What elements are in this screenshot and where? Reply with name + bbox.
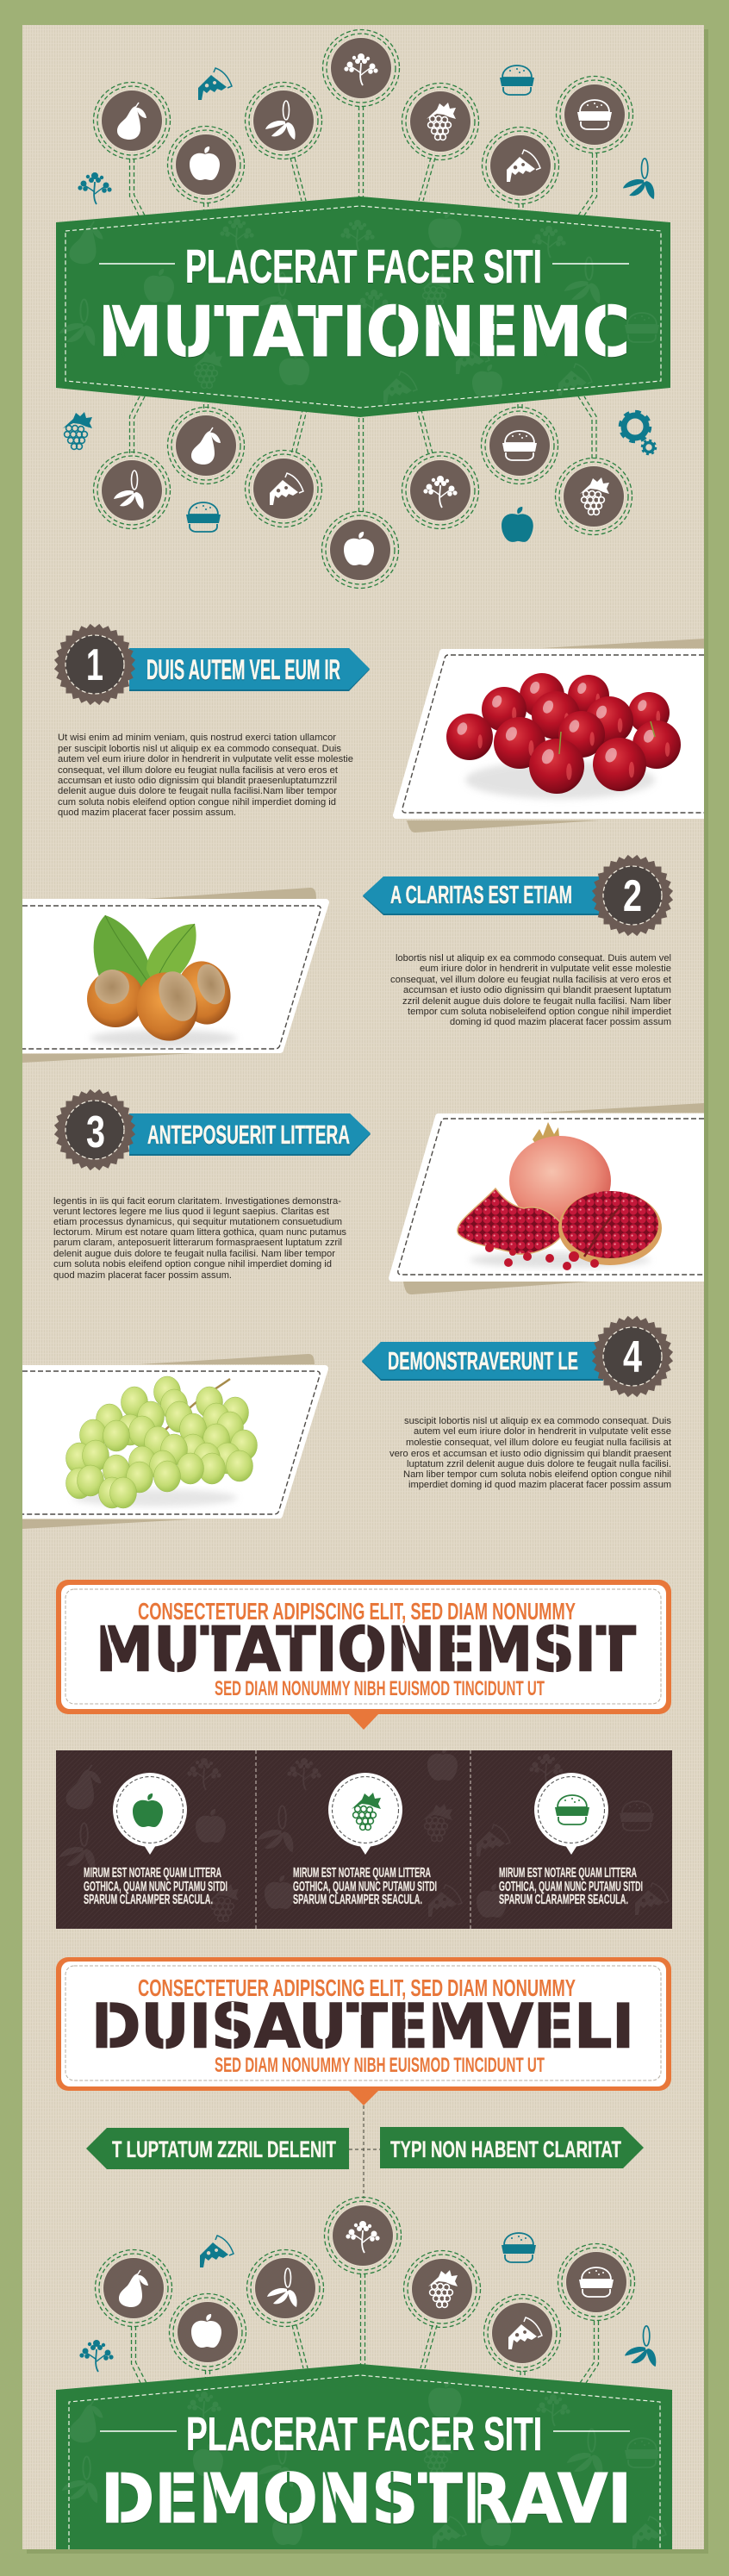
footer main title: DEMONSTRAVI: [101, 2461, 632, 2539]
icon node: burger lower: [481, 407, 558, 484]
photo: pomegranate: [458, 1122, 662, 1270]
tan shadow card 4: [22, 1354, 315, 1529]
dark panel watermarks: [59, 1747, 669, 1921]
column 1 text: SPARUM CLARAMPER SEACULA.: [84, 1893, 213, 1907]
photo card 4: [9, 1369, 325, 1515]
body text 4: molestie consequat, vel illum dolore eu feugiat nulla facilisis at: [406, 1438, 672, 1448]
ribbon 1: [129, 648, 370, 691]
column 2 text: GOTHICA, QUAM NUNC PUTAMU SITDI: [293, 1880, 437, 1894]
photo card 1: [396, 652, 715, 815]
number badge 3: 3: [86, 1107, 105, 1157]
body text 2: eum iriure dolor in hendrerit in vulputate velit esse molestie: [420, 964, 671, 974]
body text 4: Nam liber tempor cum soluta nobis eleifend option congue nihil: [403, 1469, 671, 1480]
icon node: banana: [245, 83, 322, 159]
column 3 text: SPARUM CLARAMPER SEACULA.: [499, 1893, 628, 1907]
body text 2: accumsan et iusto odio dignissim qui blandit praesent luptatum: [403, 985, 671, 995]
body text 4: vero eros et accumsan et iusto odio dignissim qui blandit praesent: [389, 1449, 672, 1459]
body text 1: accumsan et iusto odio dignissim qui blandit praesenluptatumzzril: [58, 776, 337, 786]
section 1: [54, 624, 715, 833]
body text 4: [389, 1416, 672, 1490]
body text 1: quod mazim placerat facer possim assum.: [58, 808, 236, 818]
section 4: [9, 1316, 673, 1529]
banner dashed outline: [65, 206, 661, 408]
callout arrow: [348, 1713, 379, 1730]
footer dashed outline: [69, 2375, 660, 2549]
number badge 1: 1: [86, 640, 103, 690]
green ribbon left: [86, 2128, 349, 2169]
photo card 3: [392, 1117, 715, 1278]
body text 4: luptatum zzril delenit augue duis dolore te feugait nulla facilisi.: [407, 1459, 671, 1469]
teal icons lower: [63, 412, 656, 542]
body text 1: delenit augue duis dolore te feugait nulla facilisi.Nam liber tempor: [58, 786, 337, 796]
body text 1: Ut wisi enim ad minim veniam, quis nostrud exerci tation ullamcor: [58, 733, 336, 743]
ribbon 4: DEMONSTRAVERUNT LE: [388, 1348, 578, 1375]
green ribbon left: T LUPTATUM ZZRIL DELENIT: [112, 2136, 336, 2162]
icon node: burger: [557, 76, 632, 153]
body text 2: consequat, vel illum dolore eu feugiat nulla facilisis at vero eros et: [390, 975, 672, 985]
body text 2: tempor cum soluta nobiseleifend option congue nihil imperdiet: [408, 1007, 672, 1017]
number badge 4: [592, 1316, 673, 1397]
body text 4: suscipit lobortis nisl ut aliquip ex ea commodo consequat. Duis: [404, 1416, 671, 1426]
column 2 text: SPARUM CLARAMPER SEACULA.: [293, 1893, 422, 1907]
number badge 2: 2: [623, 871, 642, 921]
icon node: banana lower: [93, 452, 171, 529]
icon node: grapes lower: [555, 458, 632, 534]
column 1 text: [84, 1866, 227, 1907]
number badge 1: [54, 624, 135, 705]
body text 3: [53, 1196, 346, 1281]
icon node: pear: [93, 83, 171, 159]
callout box: mutationemsit: [56, 1580, 671, 1730]
body text 1: autem vel eum iriure dolor in hendrerit in vulputate velit esse molestie: [58, 754, 353, 764]
footer subtitle: PLACERAT FACER SITI: [186, 2407, 542, 2461]
callout subline: SED DIAM NONUMMY NIBH EUISMOD TINCIDUNT UT: [215, 2054, 545, 2077]
white inner box: [61, 1585, 666, 1709]
dark panel: three columns: [56, 1747, 672, 1929]
number badge 4: 4: [623, 1332, 642, 1382]
column 1 text: GOTHICA, QUAM NUNC PUTAMU SITDI: [84, 1880, 227, 1894]
banner watermark icons: [59, 211, 659, 403]
callout title: MUTATIONEMSIT: [96, 1613, 637, 1686]
column 2 text: [293, 1866, 437, 1907]
photo: red plums: [446, 673, 681, 799]
photo: hazelnuts and leaves: [87, 915, 238, 1048]
body text 4: autem vel eum iriure dolor in hendrerit in vulputate velit esse: [414, 1426, 671, 1437]
body text 2: zzril delenit augue duis dolore te feugait nulla facilisi. Nam liber: [402, 996, 671, 1007]
icon node: parsley lower: [402, 452, 479, 529]
column 3 text: [499, 1866, 643, 1907]
body text 3: cum soluta nobis eleifend option congue nihil imperdiet doming id: [53, 1259, 332, 1269]
body text 3: etiam processus dynamicus, qui sequitur mutationem consuetudium: [53, 1217, 342, 1227]
body text 3: quod mazim placerat facer possim assum.: [53, 1270, 232, 1281]
connector lines above banner: [129, 106, 596, 215]
footer rule lines: [100, 2430, 630, 2432]
body text 2: lobortis nisl ut aliquip ex ea commodo consequat. Duis autem vel: [396, 953, 671, 964]
banner hexagon: [56, 196, 670, 417]
footer banner shape: [56, 2364, 672, 2549]
photo card 2: [9, 902, 326, 1050]
dashed connector to lower tree: [349, 2105, 380, 2199]
icon node: grapes: [402, 83, 479, 160]
green ribbon right: [380, 2127, 644, 2168]
body text 3: legentis in iis qui facit eorum claritatem. Investigationes demonstra-: [53, 1196, 341, 1207]
ribbon 1: DUIS AUTEM VEL EUM IR: [146, 654, 340, 685]
callout title: DUISAUTEMVELI: [91, 1991, 634, 2061]
icon tree: footer group: [79, 2198, 656, 2383]
body text 3: lectorum. Mirum est notare quam littera gothica, quam nunc putamus: [53, 1227, 346, 1238]
body text 3: parum claram, anteposuerit litterarum formaspraesent luptatum zzril: [53, 1238, 342, 1248]
section 2: [9, 855, 673, 1063]
green ribbon right: TYPI NON HABENT CLARITAT: [390, 2136, 621, 2162]
callout box: duisautemveli: [56, 1957, 671, 2105]
body text 1: [58, 733, 353, 818]
body text 1: per suscipit lobortis nisl ut aliquip ex ea commodo consequat. Duis: [58, 744, 341, 754]
body text 3: delenit augue duis dolore te feugait nulla facilisi. Nam liber tempor: [53, 1249, 335, 1259]
column 2: grapes bubble: [328, 1773, 402, 1855]
column 1: apple bubble: [113, 1773, 187, 1855]
ribbon 3: ANTEPOSUERIT LITTERA: [147, 1120, 350, 1150]
column 2 text: MIRUM EST NOTARE QUAM LITTERA: [293, 1866, 431, 1881]
photo: green grapes: [65, 1376, 257, 1508]
top banner: [56, 196, 670, 417]
icon node: pizza lower: [245, 450, 322, 527]
banner subtitle: PLACERAT FACER SITI: [185, 240, 542, 293]
icon node: pear lower: [167, 407, 245, 484]
column 3: burger bubble: [534, 1773, 608, 1855]
tan shadow card 2: [22, 888, 316, 1063]
callout arrow: [348, 2090, 379, 2105]
ribbon 3: [129, 1113, 371, 1156]
icon node: apple: [167, 126, 245, 203]
body text 3: verunt lectores legere me lius quod ii legunt saepius. Claritas est: [53, 1207, 330, 1217]
icon node: pizza: [483, 128, 558, 203]
banner main title: MUTATIONEMC: [98, 293, 630, 372]
ribbon 2: [363, 876, 603, 915]
section 3: [53, 1089, 715, 1294]
body text 2: doming id quod mazim placerat facer possim assum: [450, 1017, 671, 1027]
number badge 3: [54, 1089, 135, 1170]
icon tree: top header group: [78, 29, 654, 215]
number badge 2: [592, 855, 673, 936]
footer banner: [56, 2364, 672, 2549]
footer watermark icons: [62, 2380, 666, 2548]
tan shadow card 1: [407, 639, 704, 833]
ribbon 2: A CLARITAS EST ETIAM: [390, 882, 572, 909]
column 1 text: MIRUM EST NOTARE QUAM LITTERA: [84, 1866, 221, 1881]
callout subline: SED DIAM NONUMMY NIBH EUISMOD TINCIDUNT UT: [215, 1677, 545, 1700]
body text 2: [390, 953, 672, 1027]
white inner box: [61, 1962, 666, 2086]
ribbon 4: [362, 1342, 603, 1381]
teal icons scattered: [78, 65, 654, 204]
connector lines below banner: [129, 396, 596, 512]
icon tree: lower header group: [63, 396, 656, 588]
body text 4: imperdiet doming id quod mazim placerat facer possim assum: [408, 1480, 671, 1490]
orange frame: [56, 1580, 671, 1714]
banner rule lines: [99, 263, 629, 265]
orange frame: [56, 1957, 671, 2091]
icon node: apple lower: [322, 512, 398, 588]
icon node: parsley: [322, 29, 400, 107]
tan shadow card 3: [403, 1103, 704, 1294]
body text 1: consequat, vel illum dolore eu feugiat nulla facilisis at vero eros et: [58, 765, 339, 776]
body text 1: cum soluta nobis eleifend option congue nihil imperdiet doming id: [58, 797, 336, 808]
